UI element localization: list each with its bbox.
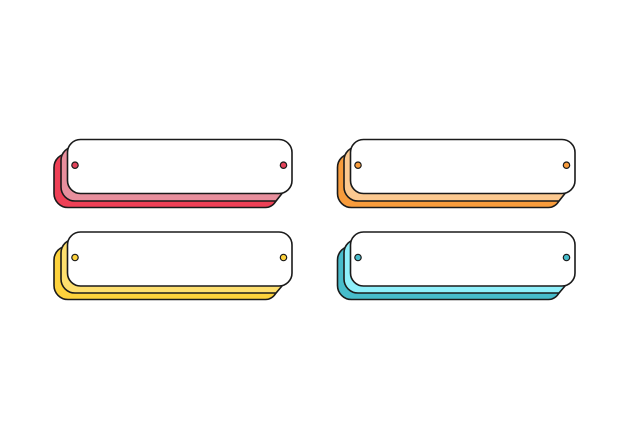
left dot: red [72, 162, 78, 168]
back layer: orange [338, 154, 564, 208]
right dot: teal [563, 254, 570, 261]
front card: orange banner [350, 140, 575, 194]
back layer: teal [338, 246, 564, 300]
middle layer: light red [61, 146, 282, 201]
front card: teal banner [350, 232, 575, 286]
right dot: yellow [280, 254, 287, 261]
right dot: orange [563, 162, 570, 168]
banner: orange [338, 140, 575, 208]
middle layer: light orange [344, 146, 565, 201]
right dot: red [280, 162, 287, 168]
back layer: yellow [54, 246, 282, 300]
middle layer: light yellow [61, 239, 282, 293]
front card: red banner [68, 140, 292, 194]
banner: yellow [54, 232, 292, 300]
left dot: teal [355, 254, 361, 261]
banner: red [54, 140, 292, 208]
left dot: yellow [72, 254, 78, 261]
back layer: red [54, 154, 282, 208]
middle layer: light teal [344, 239, 565, 293]
front card: yellow banner [68, 232, 292, 286]
left dot: orange [355, 162, 361, 168]
banner: teal [338, 232, 575, 300]
